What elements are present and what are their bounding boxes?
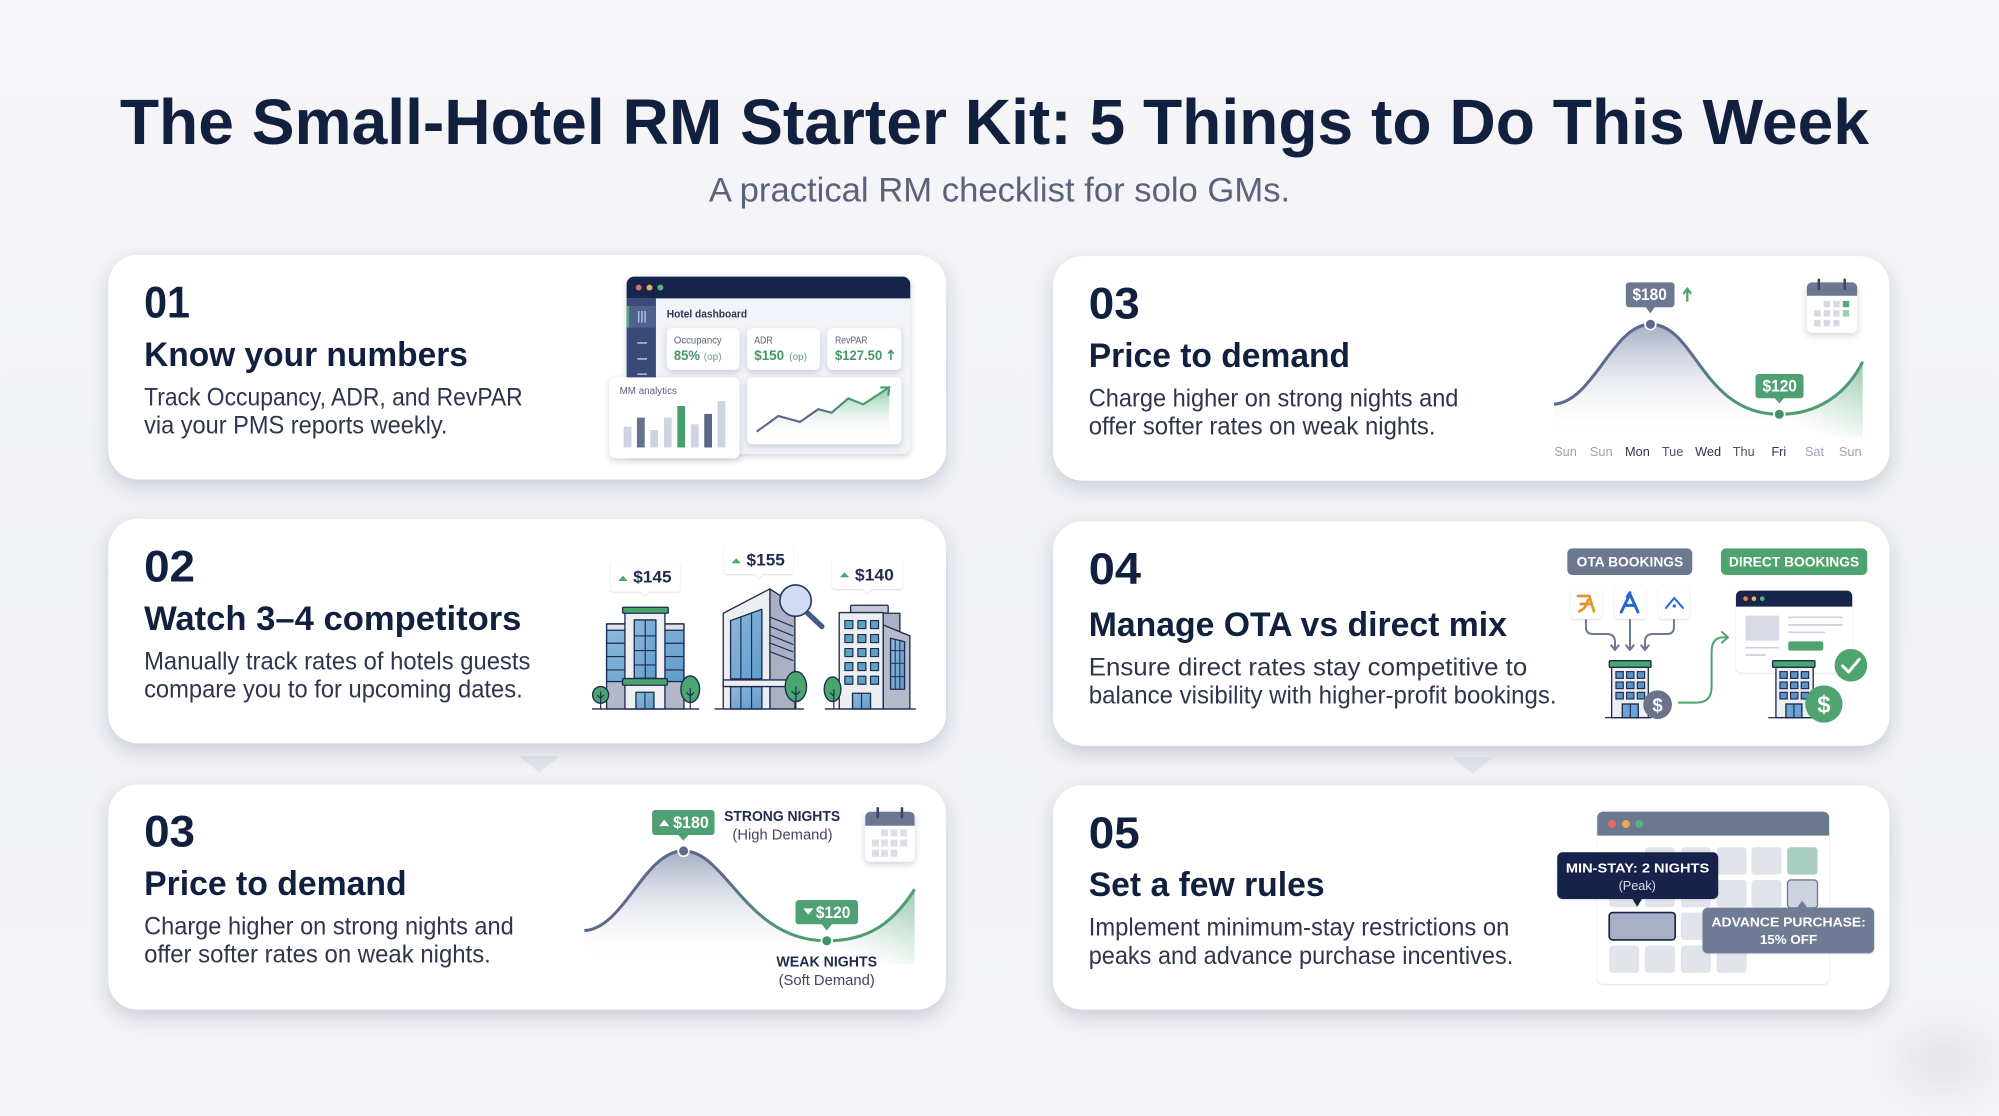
icon: check badge xyxy=(1835,649,1867,682)
icon: dollar badge xyxy=(1805,685,1843,723)
panel: 01 know your numbers xyxy=(108,255,946,479)
icon: calendar xyxy=(1807,280,1857,333)
dashboard illustration: $127.50 xyxy=(835,347,882,363)
heading: Set a few rules xyxy=(1089,866,1325,904)
building 1 with price tag xyxy=(592,607,700,709)
price tag $145 xyxy=(611,562,680,596)
body text: Charge higher on strong nights and xyxy=(144,913,514,940)
day labels: Sun xyxy=(1554,444,1577,459)
tag $120: $120 xyxy=(1762,376,1797,395)
tag $120: $120 xyxy=(816,903,850,922)
dashboard illustration: 85% xyxy=(674,347,701,363)
connector arrow: right column xyxy=(1452,757,1493,774)
label strong nights: STRONG NIGHTS xyxy=(724,809,840,825)
panel: 05 set a few rules xyxy=(1053,785,1889,1010)
tag $120 xyxy=(1755,374,1804,403)
callout: advance purchase: 15% OFF xyxy=(1760,933,1817,947)
connector arrow: left column xyxy=(519,756,560,773)
callout: advance purchase: ADVANCE PURCHASE: xyxy=(1712,916,1866,930)
body text: Charge higher on strong nights and xyxy=(1089,386,1458,413)
tag $180 xyxy=(1626,282,1675,313)
body text: peaks and advance purchase incentives. xyxy=(1089,943,1513,970)
OTA label xyxy=(1567,548,1692,575)
heading: Manage OTA vs direct mix xyxy=(1089,606,1507,644)
price tag $155 xyxy=(724,545,793,578)
day labels: Sat xyxy=(1805,444,1825,459)
body text: Manually track rates of hotels guests xyxy=(144,648,530,675)
heading: Price to demand xyxy=(1089,337,1350,375)
hotel with grey dollar badge: $ xyxy=(1652,694,1663,715)
tag $180 xyxy=(652,810,715,841)
calendar window xyxy=(1597,812,1829,984)
label weak nights xyxy=(776,954,877,989)
heading: Watch 3–4 competitors xyxy=(144,600,521,638)
day labels: Fri xyxy=(1771,444,1786,459)
hotel buildings illustration xyxy=(592,545,916,709)
body text xyxy=(1089,655,1557,710)
panel: 04 manage OTA vs direct mix xyxy=(1053,521,1889,746)
label weak nights: (Soft Demand) xyxy=(779,973,875,989)
body text xyxy=(144,648,530,703)
callout: min-stay: (Peak) xyxy=(1619,879,1656,893)
direct label xyxy=(1721,548,1867,575)
panel: 03 price to demand (left) xyxy=(108,785,946,1010)
step number 03: 03 xyxy=(1089,280,1140,329)
label weak nights: WEAK NIGHTS xyxy=(776,954,877,970)
body text xyxy=(1089,915,1513,970)
step number 03: 03 xyxy=(144,807,195,856)
icon: calendar xyxy=(865,808,915,862)
label strong nights: (High Demand) xyxy=(732,827,832,843)
demand curve chart xyxy=(584,808,915,989)
hotel with grey dollar badge xyxy=(1605,661,1672,719)
dashboard illustration: Hotel dashboard xyxy=(667,308,747,320)
dashboard illustration: (op) xyxy=(704,352,722,363)
icon: up arrow xyxy=(1683,289,1691,302)
price tag $145: $145 xyxy=(633,568,672,587)
icon: dollar badge: $ xyxy=(1817,691,1831,718)
step number 04: 04 xyxy=(1089,545,1141,594)
body text: offer softer rates on weak nights. xyxy=(144,942,491,969)
body text xyxy=(1089,386,1458,441)
body text: via your PMS reports weekly. xyxy=(144,412,447,439)
building 2 xyxy=(715,589,807,709)
label strong nights xyxy=(724,809,840,843)
tag $120 xyxy=(796,900,858,931)
dashboard illustration: MM analytics xyxy=(620,386,677,397)
body text: Implement minimum-stay restrictions on xyxy=(1089,915,1509,942)
tag $180: $180 xyxy=(673,813,709,832)
day labels: Wed xyxy=(1695,444,1721,459)
panel: 03 price to demand (right) xyxy=(1053,256,1889,481)
tag $180: $180 xyxy=(1632,285,1667,304)
body text: balance visibility with higher-profit bookings. xyxy=(1089,683,1557,710)
day labels xyxy=(1554,444,1862,459)
building 3 xyxy=(824,605,916,709)
day labels: Tue xyxy=(1662,444,1683,459)
direct label: DIRECT BOOKINGS xyxy=(1729,554,1859,570)
dashboard illustration: Occupancy xyxy=(674,335,723,346)
heading: Price to demand xyxy=(144,865,407,903)
arrows into hotel xyxy=(1586,620,1674,650)
price tag $140: $140 xyxy=(855,565,894,584)
green arrow to direct xyxy=(1679,632,1728,703)
body text xyxy=(144,384,523,439)
dashboard illustration: ADR xyxy=(754,335,773,346)
subtitle: A practical RM checklist for solo GMs. xyxy=(709,171,1290,209)
heading: Know your numbers xyxy=(144,336,468,374)
body text xyxy=(144,913,514,969)
magnifying glass xyxy=(780,585,822,627)
calendar rules illustration xyxy=(1557,812,1874,984)
step number 02: 02 xyxy=(144,542,195,591)
OTA logo tiles xyxy=(1571,587,1690,619)
step number 05: 05 xyxy=(1089,809,1140,858)
OTA label: OTA BOOKINGS xyxy=(1577,554,1683,570)
day labels: Sun xyxy=(1839,444,1862,459)
dashboard illustration: $150 xyxy=(754,347,784,363)
booking browser window xyxy=(1736,591,1852,673)
body text: compare you to for upcoming dates. xyxy=(144,676,523,703)
day labels: Sun xyxy=(1590,444,1613,459)
step number 01: 01 xyxy=(144,278,190,327)
callout: advance purchase xyxy=(1703,901,1874,953)
OTA vs direct illustration xyxy=(1567,548,1867,723)
day labels: Mon xyxy=(1625,444,1650,459)
callout: min-stay: MIN-STAY: 2 NIGHTS xyxy=(1566,862,1709,876)
day labels: Thu xyxy=(1733,444,1755,459)
dashboard illustration: RevPAR xyxy=(835,335,868,346)
price tag $155: $155 xyxy=(747,551,785,570)
dashboard illustration: (op) xyxy=(789,352,807,363)
title: The Small-Hotel RM Starter Kit: 5 Things to Do This Week xyxy=(120,86,1869,158)
price tag $140 xyxy=(832,559,903,593)
panel: 02 watch competitors xyxy=(108,519,946,743)
weekly demand chart xyxy=(1554,280,1863,459)
callout: min-stay xyxy=(1557,852,1718,907)
body text: Ensure direct rates stay competitive to xyxy=(1089,655,1527,682)
body text: Track Occupancy, ADR, and RevPAR xyxy=(144,384,523,411)
hotel with green dollar badge xyxy=(1768,661,1817,718)
dashboard illustration xyxy=(609,277,910,458)
body text: offer softer rates on weak nights. xyxy=(1089,414,1435,441)
